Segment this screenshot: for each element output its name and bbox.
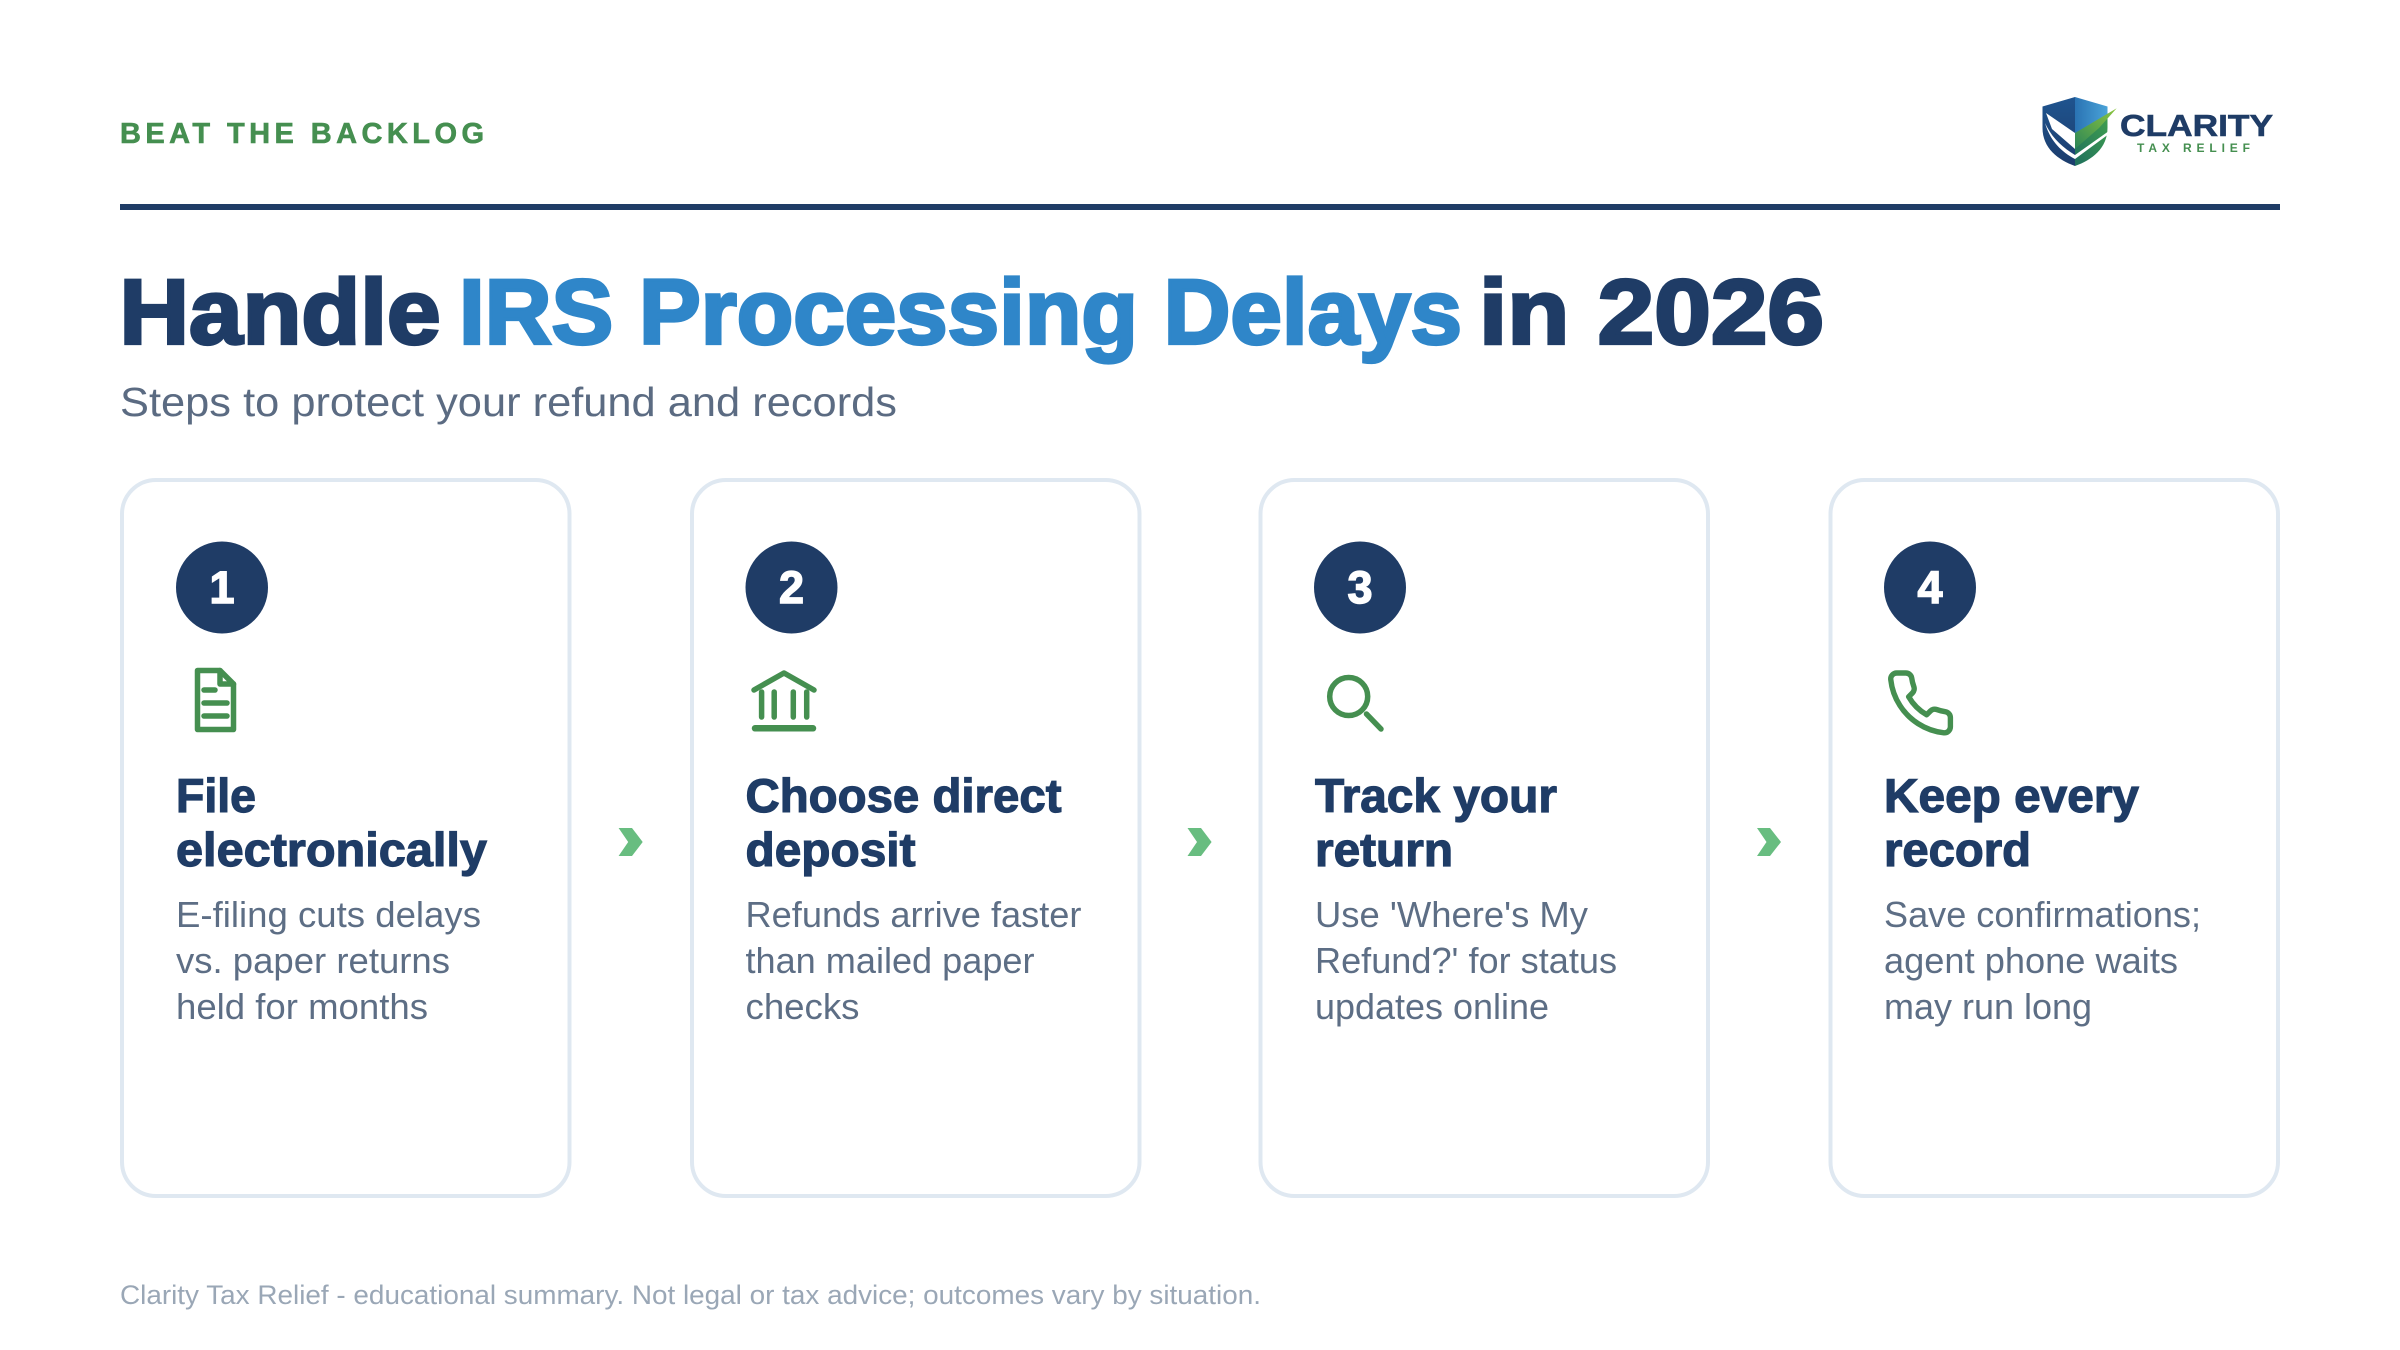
heading: Track your: [1315, 769, 1557, 822]
footer disclaimer: Clarity Tax Relief - educational summary. Not legal or tax advice; outcomes vary by situation.: [120, 1280, 1261, 1310]
panel: step 2: [692, 480, 1140, 1196]
description: held for months: [176, 986, 428, 1027]
description: updates online: [1315, 986, 1549, 1027]
description: [1884, 894, 2201, 1027]
panel: step 3: [1260, 480, 1708, 1196]
icon: magnifier: [1330, 678, 1381, 729]
heading: [746, 769, 1062, 876]
description: Save confirmations;: [1884, 894, 2201, 935]
subtitle: Steps to protect your refund and records: [120, 379, 897, 425]
heading: deposit: [746, 823, 916, 876]
arrow 2: [1188, 828, 1212, 856]
heading: Keep every: [1884, 769, 2139, 822]
description: Use 'Where's My: [1315, 894, 1588, 935]
title: Handle: [120, 262, 440, 364]
logo tagline: TAX RELIEF: [2137, 141, 2250, 155]
description: checks: [746, 986, 860, 1027]
eyebrow: beat the backlog: BEAT THE BACKLOG: [120, 118, 484, 150]
description: [176, 894, 481, 1027]
arrow 3: [1757, 828, 1781, 856]
heading: record: [1884, 823, 2031, 876]
title: [120, 262, 1824, 364]
description: may run long: [1884, 986, 2092, 1027]
description: vs. paper returns: [176, 940, 450, 981]
step number 4: [1884, 542, 1976, 634]
description: [1315, 894, 1617, 1027]
step number 2: [746, 542, 838, 634]
description: Refund?' for status: [1315, 940, 1617, 981]
step number 1: 1: [209, 562, 235, 613]
description: E-filing cuts delays: [176, 894, 481, 935]
description: Refunds arrive faster: [746, 894, 1082, 935]
icon: bank: [754, 673, 814, 728]
heading: [176, 769, 487, 876]
description: than mailed paper: [746, 940, 1035, 981]
logo wordmark: CLARITY: [2120, 108, 2273, 143]
panel: step 4: [1830, 480, 2278, 1196]
heading: [1315, 769, 1557, 876]
logo: Clarity Tax Relief: [2042, 97, 2273, 166]
title: in 2026: [1479, 262, 1824, 364]
heading: electronically: [176, 823, 487, 876]
heading: return: [1315, 823, 1453, 876]
step number 1: [176, 542, 268, 634]
icon: phone: [1891, 673, 1950, 733]
heading: File: [176, 769, 256, 822]
description: agent phone waits: [1884, 940, 2178, 981]
step number 3: 3: [1347, 562, 1373, 613]
header rule: [120, 204, 2280, 210]
title: IRS Processing Delays: [459, 262, 1462, 364]
arrow 1: [619, 828, 643, 856]
panel: step 1: [122, 480, 570, 1196]
step number 4: 4: [1917, 562, 1943, 613]
step number 2: 2: [779, 562, 804, 613]
icon: shield mark: [2042, 97, 2117, 166]
icon: document: [198, 670, 234, 730]
step number 3: [1314, 542, 1406, 634]
description: [746, 894, 1082, 1027]
heading: [1884, 769, 2139, 876]
heading: Choose direct: [746, 769, 1062, 822]
